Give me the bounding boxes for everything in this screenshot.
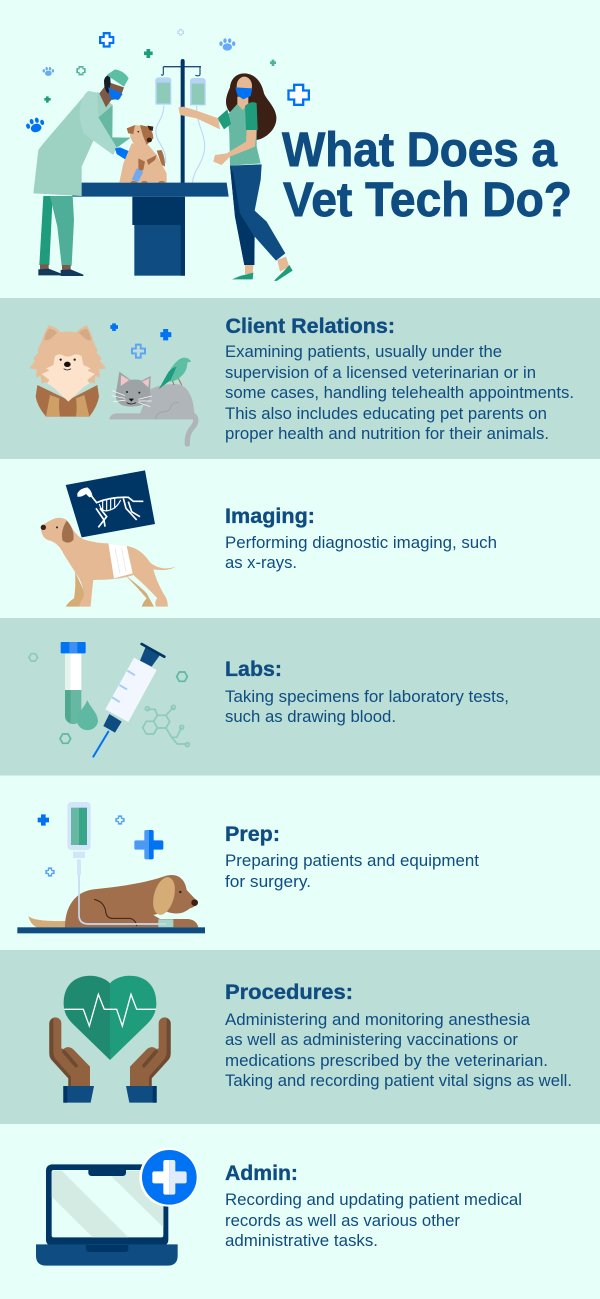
cat: [109, 372, 196, 444]
IV pole and bags: [155, 59, 206, 187]
body text: Taking and recording patient vital signs as well.: [225, 1072, 572, 1090]
heart with pulse: [64, 976, 156, 1060]
body text: as x-rays.: [225, 554, 297, 572]
lying dog: [28, 875, 198, 927]
heading: Labs:: [225, 658, 282, 681]
exam table: [72, 183, 229, 276]
body text: Recording and updating patient medical: [225, 1191, 522, 1209]
illustration: pomeranian, cat and bird: [29, 323, 196, 444]
right hand: [126, 1017, 171, 1103]
IV bag and tube: [67, 802, 91, 875]
heading: Admin:: [225, 1162, 298, 1185]
body text: [225, 1011, 572, 1090]
title: What Does a: [282, 123, 558, 177]
panel: client relations: [0, 298, 600, 459]
illustration: test tube and syringe: [29, 642, 189, 757]
syringe: [93, 644, 164, 757]
illustration: vets treating a dog: [25, 29, 310, 281]
icon: paw prints: [25, 38, 235, 134]
body text: Taking specimens for laboratory tests,: [225, 688, 509, 706]
panel background: [0, 618, 600, 776]
panel: labs: [0, 618, 600, 776]
body text: as well as administering vaccinations or: [225, 1031, 518, 1049]
illustration: hands holding heart: [49, 976, 171, 1103]
title: [282, 123, 572, 227]
panel: admin: [36, 1148, 522, 1266]
heading: Imaging:: [225, 505, 315, 528]
icon: decorative plus signs: [44, 29, 310, 106]
body text: Examining patients, usually under the: [225, 343, 502, 361]
body text: [225, 852, 479, 891]
body text: Administering and monitoring anesthesia: [225, 1011, 531, 1029]
heading: Client Relations:: [226, 315, 395, 338]
plus signs: [38, 814, 163, 877]
vet tech with long hair: [178, 73, 293, 281]
laptop: [36, 1164, 178, 1266]
panel background: [0, 298, 600, 459]
panel: imaging: [41, 470, 497, 607]
molecule and hexagons: [29, 654, 189, 747]
body text: [225, 534, 497, 572]
body text: medications prescribed by the veterinarian.: [225, 1052, 548, 1070]
heading: Procedures:: [225, 981, 353, 1004]
body text: [225, 343, 574, 443]
body text: such as drawing blood.: [225, 708, 396, 726]
plus signs: [110, 323, 171, 359]
body text: Preparing patients and equipment: [225, 852, 479, 870]
icon: medical cross badge: [139, 1148, 198, 1207]
bird: [159, 358, 191, 389]
panel: hero: [25, 29, 572, 281]
body text: for surgery.: [225, 873, 311, 891]
x-ray film: [66, 470, 155, 537]
illustration: dog on IV drip: [17, 802, 205, 933]
body text: proper health and nutrition for their animals.: [225, 425, 549, 443]
dog patient on table: [119, 125, 167, 183]
body text: This also includes educating pet parents on: [225, 405, 547, 423]
illustration: dog with x-ray: [41, 470, 176, 607]
vet tech in green scrubs: [33, 69, 135, 276]
pomeranian: [29, 325, 106, 417]
table: [17, 927, 205, 933]
left hand: [49, 1017, 94, 1103]
panel background: [0, 950, 600, 1124]
body text: some cases, handling telehealth appointments.: [225, 384, 574, 402]
heading: Prep:: [225, 823, 280, 846]
title: Vet Tech Do?: [283, 173, 572, 227]
body text: records as well as various other: [225, 1212, 461, 1230]
body text: [225, 688, 509, 726]
body text: Performing diagnostic imaging, such: [225, 534, 497, 552]
test tube: [61, 642, 86, 724]
panel: procedures: [0, 950, 600, 1124]
body text: administrative tasks.: [225, 1232, 378, 1250]
illustration: laptop with medical cross: [36, 1148, 198, 1266]
body text: supervision of a licensed veterinarian or in: [225, 364, 536, 382]
dog with bandage: [41, 518, 176, 607]
panel: prep: [17, 802, 479, 933]
blood drop: [77, 700, 98, 730]
body text: [225, 1191, 522, 1250]
